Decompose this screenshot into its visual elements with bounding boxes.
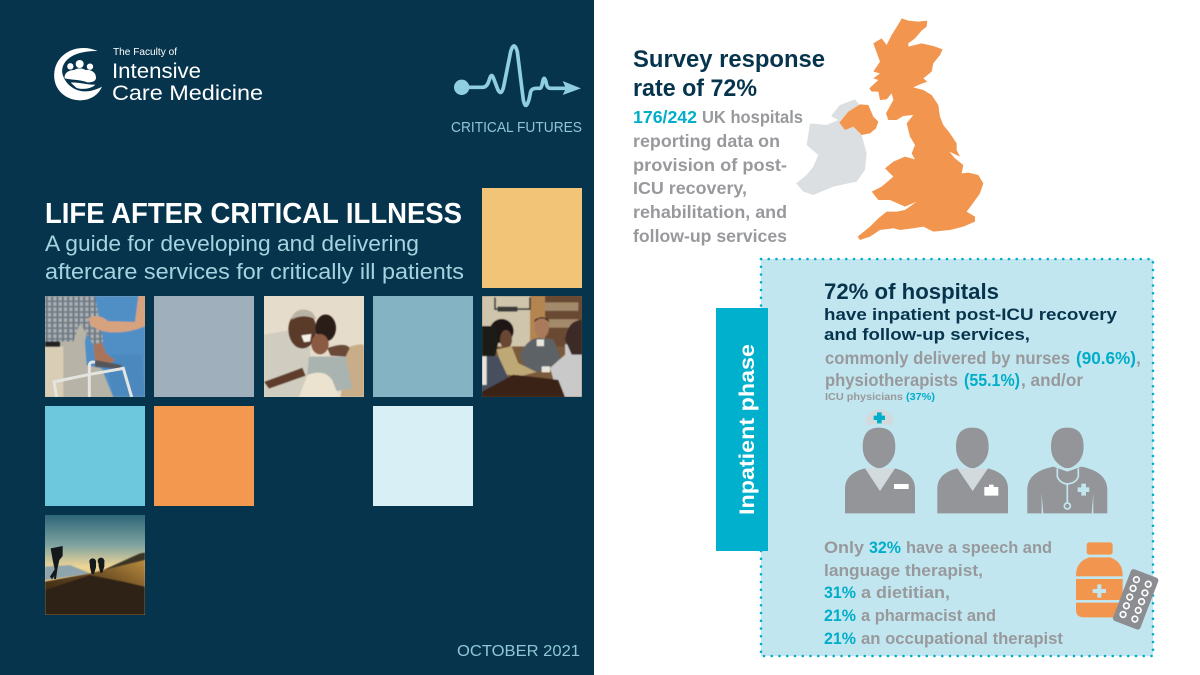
photo: carer and walking frame bbox=[45, 296, 145, 397]
heading: survey response: rate of 72% bbox=[633, 75, 757, 102]
text block: survey description: reporting data on bbox=[633, 131, 780, 151]
tab: inpatient phase label bbox=[716, 308, 768, 551]
text block: other professions: Only bbox=[824, 538, 865, 557]
text block: other professions: 21% bbox=[824, 629, 856, 648]
text block: delivered by: commonly delivered by nurses bbox=[825, 348, 1070, 368]
text block: survey description: rehabilitation, and bbox=[633, 202, 787, 222]
tab: inpatient phase label: Inpatient phase bbox=[735, 344, 759, 515]
panel: navy cover bbox=[0, 0, 594, 675]
text block: delivered by: , bbox=[1136, 348, 1141, 368]
date: OCTOBER 2021 bbox=[457, 643, 580, 660]
text block: delivered by: (55.1%) bbox=[964, 370, 1020, 390]
heading: 72% of hospitals: 72% of hospitals bbox=[824, 279, 999, 304]
map: Republic of Ireland bbox=[796, 99, 867, 195]
text block: other professions: 32% bbox=[869, 538, 901, 557]
icon: physiotherapist bbox=[937, 428, 1008, 513]
icon: nurse bbox=[845, 409, 915, 513]
tile: grey-blue square bbox=[154, 296, 254, 397]
icon: ICU physician bbox=[1027, 428, 1107, 513]
heading: survey response: Survey response bbox=[633, 46, 825, 73]
subheading: inpatient services: have inpatient post-ICU recovery bbox=[824, 305, 1118, 324]
photo: grandfather and child bbox=[264, 296, 364, 397]
text block: delivered by bbox=[825, 348, 1141, 403]
text block: other professions: a dietitian, bbox=[861, 583, 950, 602]
tile: teal-grey square bbox=[373, 296, 473, 397]
text block: survey description bbox=[633, 107, 803, 246]
map: Great Britain bbox=[858, 18, 983, 240]
title: LIFE AFTER CRITICAL ILLNESS bbox=[45, 198, 462, 230]
text block: delivered by: , and/or bbox=[1021, 370, 1083, 390]
tile: orange square bbox=[154, 406, 254, 506]
photo: friends in a cafe bbox=[482, 296, 582, 397]
icon: heartbeat arrow bbox=[454, 46, 581, 105]
logo: Faculty of Intensive Care Medicine bbox=[54, 46, 263, 105]
panel: inpatient phase bbox=[716, 259, 1159, 656]
logo text: Care Medicine bbox=[112, 81, 263, 105]
subheading: inpatient services: and follow-up services, bbox=[824, 325, 1030, 344]
text block: other professions: an occupational therapist bbox=[861, 629, 1063, 648]
text block: delivered by: physiotherapists bbox=[825, 370, 958, 390]
text block: other professions: 21% bbox=[824, 606, 856, 625]
logo text: Intensive bbox=[112, 59, 201, 83]
text block: survey description: follow-up services bbox=[633, 226, 787, 246]
subtitle bbox=[45, 231, 464, 284]
tile: yellow square bbox=[482, 188, 582, 288]
map: UK and Ireland bbox=[796, 18, 983, 240]
logo text bbox=[112, 46, 263, 105]
icon: crescent with people and hand bbox=[54, 48, 102, 100]
text block: delivered by: (90.6%) bbox=[1076, 348, 1136, 368]
photo: hikers at sunset bbox=[45, 515, 145, 615]
subheading: inpatient services bbox=[824, 305, 1118, 344]
text block: other professions: have a speech and bbox=[906, 538, 1052, 557]
subtitle: A guide for developing and delivering bbox=[45, 231, 419, 256]
text block: survey description: provision of post- bbox=[633, 155, 787, 175]
tile: pale blue square bbox=[373, 406, 473, 506]
text block: other professions: 31% bbox=[824, 583, 856, 602]
subtitle: aftercare services for critically ill patients bbox=[45, 259, 464, 284]
text block: other professions bbox=[824, 538, 1063, 648]
logo text: The Faculty of bbox=[113, 46, 177, 58]
heading: survey response bbox=[633, 46, 825, 102]
text block: survey description: 176/242 bbox=[633, 107, 697, 127]
text block: other professions: a pharmacist and bbox=[861, 606, 996, 625]
text block: delivered by: ICU physicians bbox=[825, 392, 903, 403]
tile: bright blue square bbox=[45, 406, 145, 506]
text block: survey description: UK hospitals bbox=[702, 107, 803, 127]
text block: delivered by: (37%) bbox=[906, 392, 935, 403]
text block: other professions: language therapist, bbox=[824, 561, 983, 580]
map: Northern Ireland bbox=[839, 104, 878, 135]
text block: survey description: ICU recovery, bbox=[633, 178, 747, 198]
icon: medicine bottle and pills bbox=[1076, 542, 1159, 630]
label: critical futures: CRITICAL FUTURES bbox=[451, 119, 582, 136]
